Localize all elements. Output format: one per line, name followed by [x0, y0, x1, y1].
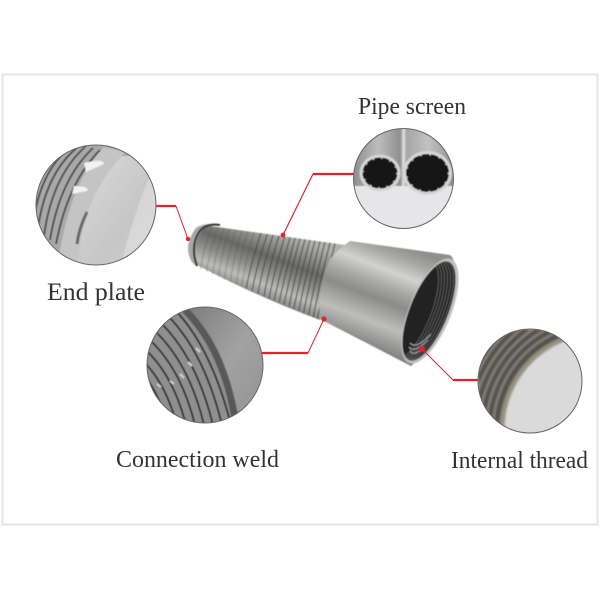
detail circle: internal thread	[478, 328, 582, 434]
label: end plate: End plate	[47, 277, 145, 306]
end plate on pipe	[188, 224, 220, 266]
pipe screen product	[188, 224, 470, 371]
left pipe end	[360, 154, 400, 192]
right pipe end	[403, 151, 452, 195]
callout line: internal thread	[419, 346, 478, 380]
callout line: connection weld	[262, 316, 327, 353]
callout line: end plate	[156, 206, 190, 241]
collar opening with internal thread	[401, 258, 460, 364]
label: internal thread: Internal thread	[451, 448, 588, 474]
label: pipe screen: Pipe screen	[358, 94, 466, 120]
threaded collar	[319, 241, 454, 366]
detail circle: connection weld	[146, 306, 264, 424]
wire wrapped pipe body	[190, 225, 345, 320]
callout line: pipe screen	[281, 174, 354, 237]
detail circle: end plate	[30, 145, 160, 270]
detail circle: pipe screen	[353, 128, 454, 230]
label: connection weld: Connection weld	[116, 447, 279, 473]
page frame	[2, 74, 598, 524]
